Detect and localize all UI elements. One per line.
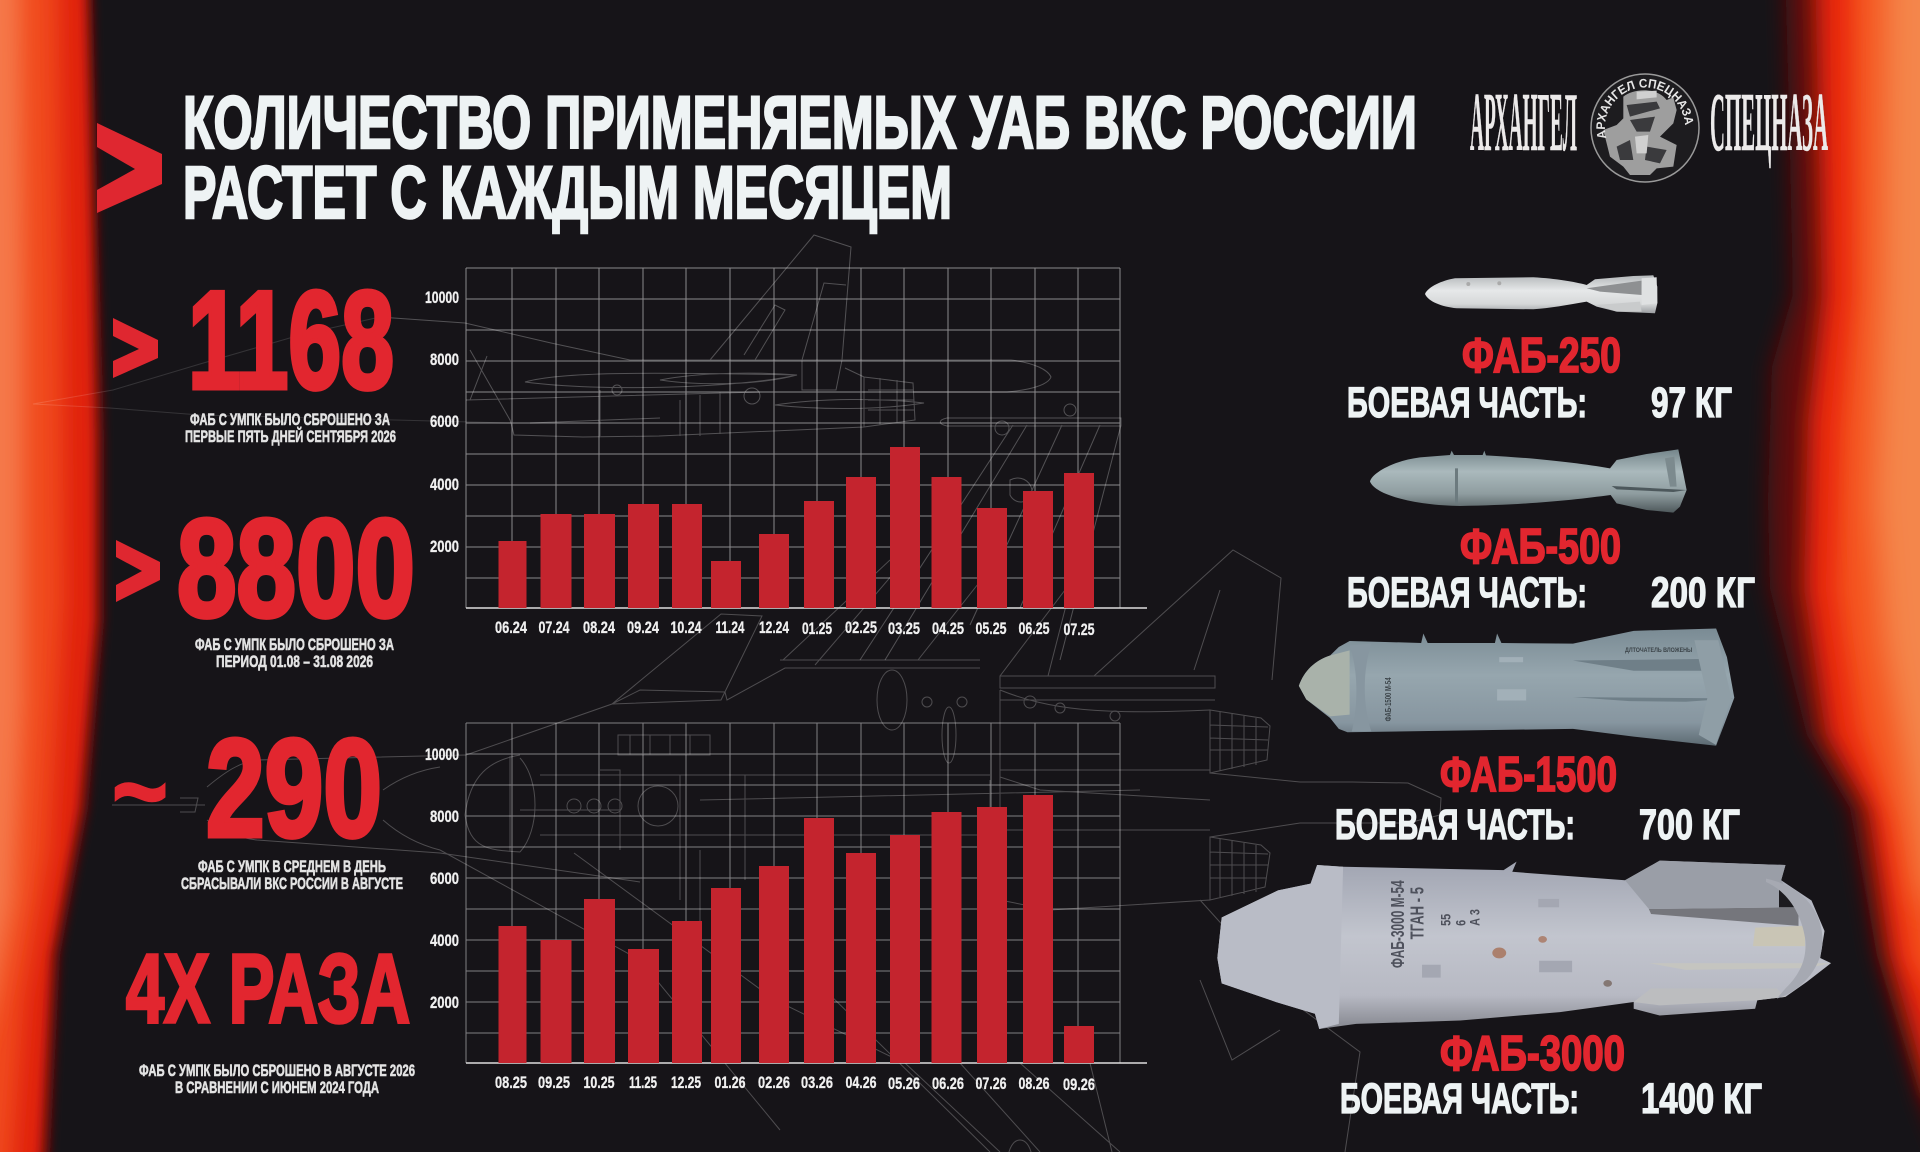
warhead label: БОЕВАЯ ЧАСТЬ:	[1347, 379, 1587, 427]
x axis labels: 04.26	[846, 1073, 876, 1092]
y axis labels: 4000	[430, 931, 459, 950]
x axis labels: 04.25	[932, 619, 964, 638]
x axis labels	[495, 618, 1094, 639]
y axis labels: 6000	[430, 412, 459, 431]
number: 1168	[188, 263, 394, 418]
x axis labels: 12.24	[759, 618, 789, 637]
aircraft blueprint: top view	[112, 550, 1441, 1152]
x axis labels: 11.24	[716, 618, 745, 637]
panel: ФАБ-1500	[1299, 628, 1740, 849]
number: 290	[206, 711, 382, 866]
caption: СБРАСЫВАЛИ ВКС РОССИИ В АВГУСТЕ	[181, 874, 403, 893]
tilde: ~	[112, 730, 168, 853]
bars	[498, 447, 1094, 608]
name: ФАБ-3000	[1440, 1027, 1625, 1081]
panel: ФАБ-3000	[1217, 861, 1831, 1123]
number: 4Х РАЗА	[126, 934, 410, 1043]
left red glow	[0, 0, 104, 1152]
caption	[181, 857, 403, 893]
aircraft blueprint: side view	[380, 235, 1121, 660]
warhead value: 1400 КГ	[1641, 1075, 1762, 1123]
chart: bombs June 2024 to July 2025	[425, 268, 1147, 639]
warhead value: 97 КГ	[1651, 379, 1732, 427]
name: ФАБ-250	[1462, 329, 1621, 383]
x axis labels: 08.26	[1018, 1074, 1050, 1093]
y axis labels: 10000	[425, 745, 459, 764]
x axis labels: 10.25	[584, 1073, 614, 1092]
caption: В СРАВНЕНИИ С ИЮНЕМ 2024 ГОДА	[175, 1078, 379, 1097]
caption	[185, 410, 396, 446]
y axis labels	[425, 745, 459, 1012]
chart grid	[466, 268, 1120, 608]
name: ФАБ-1500	[1440, 748, 1617, 802]
y axis labels: 2000	[430, 993, 459, 1012]
bomb illustration: 55	[1438, 914, 1454, 926]
icon: chevron	[116, 540, 160, 602]
caption: ФАБ С УМПК В СРЕДНЕМ В ДЕНЬ	[198, 857, 386, 876]
x axis labels: 01.26	[714, 1073, 746, 1092]
bomb illustration	[1370, 449, 1687, 513]
caption: ФАБ С УМПК БЫЛО СБРОШЕНО ЗА	[195, 635, 394, 654]
y axis labels: 6000	[430, 869, 459, 888]
warhead value: 200 КГ	[1651, 569, 1755, 617]
icon: title chevron	[97, 123, 162, 213]
chart baseline	[466, 607, 1147, 609]
icon: chevron	[113, 318, 158, 378]
bomb illustration: ДЛТОЧАТЕЛЬ ВЛОЖЕНЫ	[1625, 646, 1693, 654]
title	[183, 81, 1417, 234]
stat: 8800	[116, 491, 415, 671]
x axis labels: 11.25	[629, 1073, 657, 1092]
x axis labels: 08.24	[583, 618, 615, 637]
caption: ФАБ С УМПК БЫЛО СБРОШЕНО В АВГУСТЕ 2026	[139, 1061, 415, 1080]
logo badge: АРХАНГЕЛ СПЕЦНАЗА	[1596, 78, 1694, 138]
panel: ФАБ-250	[1347, 275, 1732, 427]
x axis labels: 06.25	[1018, 619, 1050, 638]
bomb illustration	[1425, 275, 1657, 313]
logo: Архангел Спецназа	[1470, 73, 1828, 183]
warhead value: 700 КГ	[1639, 801, 1740, 849]
caption	[195, 635, 394, 671]
name: ФАБ-500	[1460, 520, 1621, 574]
stat: 4X РАЗА	[126, 934, 415, 1097]
x axis labels: 12.25	[671, 1073, 701, 1092]
x axis labels: 02.25	[845, 618, 877, 637]
caption: ФАБ С УМПК БЫЛО СБРОШЕНО ЗА	[190, 410, 390, 429]
number: 8800	[177, 491, 415, 646]
x axis labels: 06.24	[495, 618, 527, 637]
warhead label: БОЕВАЯ ЧАСТЬ:	[1335, 801, 1575, 849]
bomb illustration: 6	[1453, 920, 1469, 926]
x axis labels: 07.25	[1064, 620, 1094, 639]
logo badge	[1590, 73, 1700, 183]
y axis labels: 4000	[430, 475, 459, 494]
x axis labels: 07.26	[976, 1074, 1006, 1093]
bomb illustration: ФАБ-3000 М-54	[1388, 880, 1408, 968]
bomb illustration	[1217, 861, 1831, 1029]
x axis labels: 03.25	[888, 619, 920, 638]
right red glow	[1768, 0, 1920, 1152]
title: РАСТЕТ С КАЖДЫМ МЕСЯЦЕМ	[183, 151, 952, 234]
bomb illustration: ТГАН - 5	[1408, 887, 1428, 939]
chart baseline	[466, 1062, 1147, 1064]
x axis labels: 05.25	[976, 619, 1006, 638]
stat: 1168	[113, 263, 396, 446]
caption	[139, 1061, 415, 1097]
bomb illustration	[1299, 628, 1734, 746]
bomb illustration: ФАБ-1500 М-54	[1383, 677, 1393, 721]
y axis labels: 2000	[430, 537, 459, 556]
x axis labels: 10.24	[670, 618, 702, 637]
x axis labels	[495, 1073, 1095, 1094]
y axis labels	[425, 288, 459, 556]
warhead label: БОЕВАЯ ЧАСТЬ:	[1340, 1075, 1579, 1123]
y axis labels: 8000	[430, 807, 459, 826]
x axis labels: 01.25	[802, 619, 832, 638]
bomb illustration: А 3	[1467, 909, 1483, 926]
caption: ПЕРВЫЕ ПЯТЬ ДНЕЙ СЕНТЯБРЯ 2026	[185, 427, 396, 446]
chart: bombs August 2025 to September 2026	[425, 723, 1147, 1094]
x axis labels: 09.24	[627, 618, 659, 637]
bars	[498, 795, 1094, 1063]
x axis labels: 02.26	[758, 1073, 790, 1092]
chart grid	[466, 723, 1120, 1063]
x axis labels: 09.26	[1063, 1075, 1095, 1094]
y axis labels: 8000	[430, 350, 459, 369]
stat: 290	[112, 711, 403, 893]
x axis labels: 05.26	[888, 1074, 920, 1093]
x axis labels: 08.25	[495, 1073, 527, 1092]
aircraft blueprint: side view nose (faint)	[33, 317, 511, 423]
caption: ПЕРИОД 01.08 – 31.08 2026	[216, 652, 373, 671]
x axis labels: 09.25	[538, 1073, 570, 1092]
panel: ФАБ-500	[1347, 449, 1755, 617]
x axis labels: 06.26	[932, 1074, 964, 1093]
badge mascot	[1603, 90, 1677, 175]
y axis labels: 10000	[425, 288, 459, 307]
warhead label: БОЕВАЯ ЧАСТЬ:	[1347, 569, 1587, 617]
x axis labels: 07.24	[538, 618, 570, 637]
x axis labels: 03.26	[801, 1073, 833, 1092]
